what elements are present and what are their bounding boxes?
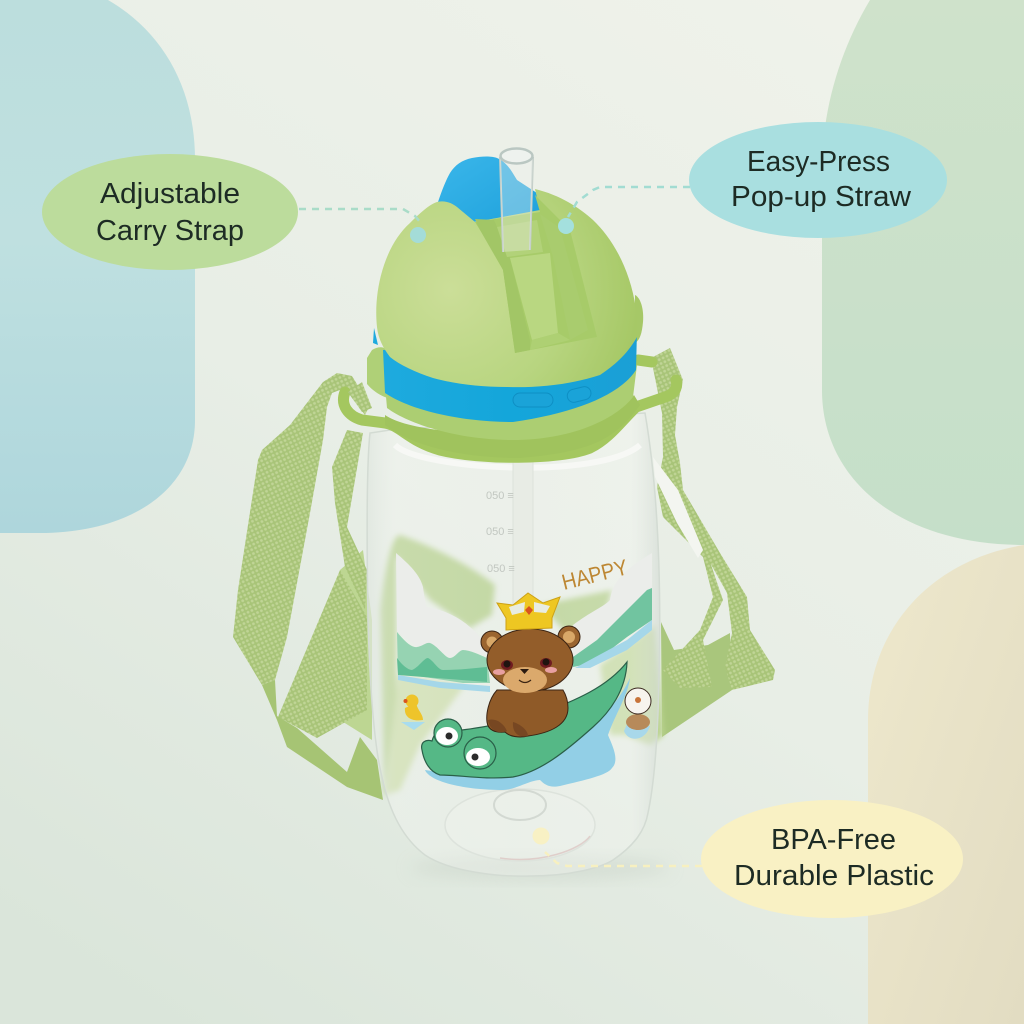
cutout interior xyxy=(475,195,597,353)
blue band xyxy=(383,330,637,422)
label: Durable Plastic xyxy=(734,860,934,892)
band buttons xyxy=(513,393,553,407)
label: Adjustable xyxy=(100,178,240,210)
scale marks: 050 ≡ xyxy=(487,563,515,575)
illustration: duck xyxy=(401,694,425,730)
label xyxy=(734,824,934,892)
leader line xyxy=(299,209,420,222)
base tint xyxy=(500,836,590,859)
anchor dot xyxy=(410,227,426,243)
diagonal strap xyxy=(278,570,367,738)
rim highlight xyxy=(395,445,640,468)
blue flip tab xyxy=(438,156,540,222)
illustration: clouds left xyxy=(396,553,490,658)
pill xyxy=(42,154,298,270)
bottle body xyxy=(367,413,660,876)
white tag xyxy=(653,457,703,558)
carry strap: left xyxy=(233,373,383,800)
left band tip xyxy=(373,328,378,345)
right clip xyxy=(635,295,643,343)
illustration: clouds right xyxy=(573,553,652,657)
wide strap xyxy=(233,373,370,685)
bottom loop xyxy=(262,680,383,800)
center block xyxy=(510,253,558,340)
callout: straw xyxy=(558,122,947,238)
blob: green xyxy=(822,0,1024,545)
left clip xyxy=(367,347,388,398)
callout: carry strap xyxy=(42,154,426,270)
floor xyxy=(530,333,570,350)
neck ring with strap handles xyxy=(344,360,677,457)
pill xyxy=(701,800,963,918)
illustration: hills left xyxy=(397,632,490,692)
rear light strap xyxy=(340,550,372,740)
anchor dot xyxy=(558,218,574,234)
label: Easy-Press xyxy=(747,146,890,178)
pill xyxy=(689,122,947,238)
left rib xyxy=(475,219,530,353)
left strap fold over ring xyxy=(348,382,372,412)
label xyxy=(731,146,912,213)
illustration: bear xyxy=(481,593,580,737)
neck ring fill xyxy=(385,395,640,458)
carry strap: right xyxy=(652,348,775,690)
callout: plastic xyxy=(532,800,963,918)
illustration: HAPPY: HAPPY xyxy=(559,554,630,595)
lid xyxy=(367,148,643,440)
straw top xyxy=(500,148,533,252)
band button xyxy=(566,385,592,404)
label xyxy=(96,178,244,247)
thin strap xyxy=(332,430,367,610)
leader line xyxy=(568,187,690,217)
blob: blue xyxy=(0,0,195,533)
illustration: crocodile xyxy=(422,662,627,778)
illustration: penguin xyxy=(624,688,651,739)
leader line xyxy=(545,852,702,866)
scale marks: 050 ≡ xyxy=(486,526,514,538)
base ring xyxy=(445,789,595,861)
label: Pop-up Straw xyxy=(731,181,912,213)
scale marks: 050 ≡ xyxy=(486,490,514,502)
straw xyxy=(513,462,533,612)
illustration: water pool xyxy=(425,678,630,790)
carry strap: right ground sheet xyxy=(661,622,732,737)
label: BPA-Free xyxy=(771,824,896,856)
blob: yellow xyxy=(868,545,1024,1024)
anchor dot xyxy=(532,828,550,844)
right rib xyxy=(540,214,588,340)
window xyxy=(497,220,543,257)
label: Carry Strap xyxy=(96,215,244,247)
illustration: hills right xyxy=(573,588,652,668)
base foot xyxy=(494,790,546,820)
lower collar xyxy=(385,365,637,440)
shadow under bottle xyxy=(410,856,670,880)
dome xyxy=(376,189,637,387)
crown xyxy=(497,593,560,630)
straps seen through bottle xyxy=(380,535,664,795)
